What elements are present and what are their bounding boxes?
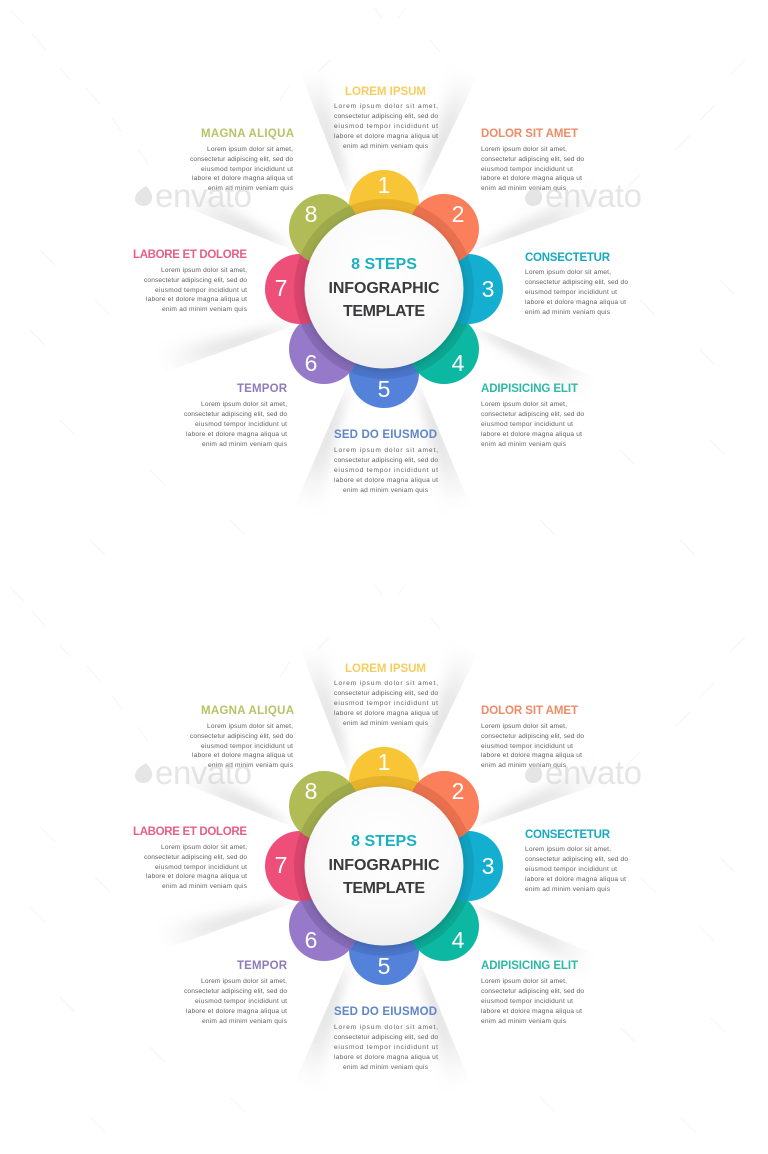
center disc	[304, 786, 464, 948]
petal 3 blue: 3	[482, 276, 494, 302]
text block: tempor: enim ad minim veniam quis	[202, 1018, 288, 1025]
text block: labore et dolore: labore et dolore magna aliqua ut	[146, 873, 247, 880]
text block: tempor: consectetur adipiscing elit, sed do	[184, 411, 287, 418]
petal 5 blue violet: 5	[378, 376, 390, 402]
text block: tempor: TEMPOR	[237, 383, 288, 395]
text block: tempor: eiusmod tempor incididunt ut	[195, 421, 287, 428]
center title: 8 STEPS	[351, 833, 417, 850]
text block: magna aliqua: Lorem ipsum dolor sit amet,	[207, 146, 293, 153]
petal 5 blue violet	[349, 940, 419, 985]
text block: tempor: consectetur adipiscing elit, sed do	[184, 988, 287, 995]
text block: sed do eiusmod: Lorem ipsum dolor sit amet,	[334, 447, 438, 454]
text block: magna aliqua: enim ad minim veniam quis	[208, 762, 294, 769]
watermark: envato left: envato	[155, 177, 252, 214]
text block: labore et dolore	[133, 249, 248, 313]
text block: consectetur: eiusmod tempor incididunt ut	[525, 289, 617, 296]
text block: labore et dolore: LABORE ET DOLORE	[133, 826, 247, 838]
text block: dolor sit amet: enim ad minim veniam quis	[481, 762, 567, 769]
petal 2 orange: 2	[452, 778, 464, 804]
wedge shadows	[182, 667, 580, 1065]
center title: TEMPLATE	[343, 303, 425, 320]
petal 6 purple: 6	[305, 350, 317, 376]
petal 5 blue violet: 5	[378, 953, 390, 979]
text block: magna aliqua: eiusmod tempor incididunt ut	[201, 743, 293, 750]
text block: dolor sit amet: labore et dolore magna aliqua ut	[481, 752, 582, 759]
text block: dolor sit amet	[481, 705, 584, 769]
center title	[328, 833, 440, 897]
petal 2 orange	[412, 194, 479, 261]
text block: sed do eiusmod: eiusmod tempor incididunt ut	[334, 1044, 438, 1051]
petal 1 yellow	[349, 170, 419, 215]
text block: tempor: Lorem ipsum dolor sit amet,	[201, 401, 287, 408]
text block: labore et dolore	[133, 826, 248, 890]
text block: magna aliqua: labore et dolore magna aliqua ut	[192, 175, 293, 182]
text block: sed do eiusmod: enim ad minim veniam quis	[343, 487, 429, 494]
text block: adipisicing elit: Lorem ipsum dolor sit amet,	[481, 978, 567, 985]
text block: lorem ipsum: eiusmod tempor incididunt ut	[334, 700, 438, 707]
text block: adipisicing elit: labore et dolore magna aliqua ut	[481, 431, 582, 438]
text block: adipisicing elit: consectetur adipiscing elit, sed do	[481, 988, 584, 995]
petal 6 purple: 6	[305, 927, 317, 953]
text block: adipisicing elit: eiusmod tempor incididunt ut	[481, 421, 573, 428]
text block: sed do eiusmod: consectetur adipiscing elit, sed do	[334, 1034, 438, 1041]
petal 3 blue	[456, 831, 503, 901]
text block: lorem ipsum: Lorem ipsum dolor sit amet,	[334, 103, 438, 110]
text block: labore et dolore: LABORE ET DOLORE	[133, 249, 247, 261]
center title: INFOGRAPHIC	[328, 280, 440, 297]
text block: adipisicing elit: labore et dolore magna aliqua ut	[481, 1008, 582, 1015]
text block: lorem ipsum	[334, 663, 438, 727]
text block: labore et dolore: enim ad minim veniam quis	[162, 883, 248, 890]
text block: labore et dolore: eiusmod tempor incididunt ut	[155, 287, 247, 294]
petal 2 orange	[412, 771, 479, 838]
text block: dolor sit amet	[481, 128, 584, 192]
petal 4 green: 4	[452, 927, 465, 953]
text block: lorem ipsum: eiusmod tempor incididunt ut	[334, 123, 438, 130]
center title	[328, 256, 440, 320]
text block: tempor: TEMPOR	[237, 960, 288, 972]
text block: tempor: eiusmod tempor incididunt ut	[195, 998, 287, 1005]
text block: dolor sit amet: consectetur adipiscing elit, sed do	[481, 733, 584, 740]
text block: lorem ipsum	[334, 86, 438, 150]
text block: labore et dolore: consectetur adipiscing elit, sed do	[144, 854, 247, 861]
petal 4 green	[412, 322, 479, 384]
text block: sed do eiusmod: labore et dolore magna aliqua ut	[334, 1054, 438, 1061]
text block: magna aliqua: MAGNA ALIQUA	[201, 128, 294, 140]
text block: dolor sit amet: eiusmod tempor incididunt ut	[481, 743, 573, 750]
text block: consectetur	[525, 252, 628, 316]
text block: adipisicing elit	[481, 383, 584, 448]
text block: adipisicing elit: Lorem ipsum dolor sit amet,	[481, 401, 567, 408]
text block: labore et dolore: consectetur adipiscing elit, sed do	[144, 277, 247, 284]
text block: adipisicing elit: enim ad minim veniam quis	[481, 1018, 567, 1025]
text block: tempor: enim ad minim veniam quis	[202, 441, 288, 448]
text block: consectetur: enim ad minim veniam quis	[525, 886, 611, 893]
watermark: envato right: envato	[545, 177, 642, 214]
panel: upper infographic	[134, 86, 640, 494]
text block: tempor: labore et dolore magna aliqua ut	[186, 1008, 287, 1015]
center title: INFOGRAPHIC	[328, 857, 440, 874]
text block: consectetur: eiusmod tempor incididunt ut	[525, 866, 617, 873]
petal 3 blue: 3	[482, 853, 494, 879]
petal 8 olive: 8	[305, 778, 317, 804]
petal 4 green: 4	[452, 350, 465, 376]
text block: magna aliqua: consectetur adipiscing elit, sed do	[190, 733, 293, 740]
text block: magna aliqua: eiusmod tempor incididunt ut	[201, 166, 293, 173]
text block: consectetur: labore et dolore magna aliqua ut	[525, 876, 626, 883]
text block: lorem ipsum: enim ad minim veniam quis	[343, 720, 429, 727]
text block: dolor sit amet: Lorem ipsum dolor sit amet,	[481, 146, 567, 153]
text block: consectetur: consectetur adipiscing elit, sed do	[525, 279, 628, 286]
wedge shadows	[182, 90, 580, 488]
text block: tempor: labore et dolore magna aliqua ut	[186, 431, 287, 438]
petal 8 olive	[289, 771, 356, 838]
petal 7 pink: 7	[275, 275, 287, 301]
text block: adipisicing elit	[481, 960, 584, 1025]
text block: sed do eiusmod	[334, 429, 438, 494]
text block: labore et dolore: labore et dolore magna aliqua ut	[146, 296, 247, 303]
text block: tempor	[184, 960, 288, 1025]
text block: lorem ipsum: consectetur adipiscing elit, sed do	[334, 690, 438, 697]
text block: lorem ipsum: consectetur adipiscing elit, sed do	[334, 113, 438, 120]
text block: lorem ipsum: Lorem ipsum dolor sit amet,	[334, 680, 438, 687]
text block: lorem ipsum: labore et dolore magna aliqua ut	[334, 710, 438, 717]
petal 7 pink: 7	[275, 852, 287, 878]
text block: dolor sit amet: enim ad minim veniam quis	[481, 185, 567, 192]
petal 1 yellow: 1	[378, 172, 390, 198]
text block: labore et dolore: enim ad minim veniam quis	[162, 306, 248, 313]
text block: dolor sit amet: DOLOR SIT AMET	[481, 705, 578, 717]
text block: magna aliqua	[190, 128, 294, 192]
text block: dolor sit amet: labore et dolore magna aliqua ut	[481, 175, 582, 182]
text block: tempor	[184, 383, 288, 448]
text block: magna aliqua: labore et dolore magna aliqua ut	[192, 752, 293, 759]
text block: dolor sit amet: consectetur adipiscing elit, sed do	[481, 156, 584, 163]
text block: adipisicing elit: ADIPISICING ELIT	[481, 960, 578, 972]
petal 1 yellow	[349, 747, 419, 792]
petal 6 purple	[289, 322, 356, 384]
petal 6 purple	[289, 899, 356, 961]
text block: lorem ipsum: enim ad minim veniam quis	[343, 143, 429, 150]
panel: lower infographic	[134, 664, 640, 1070]
petal 7 pink	[265, 254, 312, 324]
text block: sed do eiusmod: SED DO EIUSMOD	[334, 1006, 437, 1018]
text block: adipisicing elit: consectetur adipiscing elit, sed do	[481, 411, 584, 418]
text block: labore et dolore: eiusmod tempor incididunt ut	[155, 864, 247, 871]
petal 8 olive: 8	[305, 201, 317, 227]
text block: labore et dolore: Lorem ipsum dolor sit amet,	[161, 844, 247, 851]
text block: dolor sit amet: eiusmod tempor incididunt ut	[481, 166, 573, 173]
text block: sed do eiusmod: eiusmod tempor incididunt ut	[334, 467, 438, 474]
text block: adipisicing elit: ADIPISICING ELIT	[481, 383, 578, 395]
text block: consectetur: Lorem ipsum dolor sit amet,	[525, 269, 611, 276]
text block: magna aliqua: consectetur adipiscing elit, sed do	[190, 156, 293, 163]
petal 8 olive	[289, 194, 356, 261]
petal 2 orange: 2	[452, 201, 464, 227]
watermark: envato left: envato	[155, 754, 252, 791]
petal 5 blue violet	[349, 363, 419, 408]
text block: sed do eiusmod: labore et dolore magna aliqua ut	[334, 477, 438, 484]
center disc	[304, 210, 464, 372]
text block: magna aliqua: MAGNA ALIQUA	[201, 705, 294, 717]
text block: dolor sit amet: Lorem ipsum dolor sit amet,	[481, 723, 567, 730]
center title: TEMPLATE	[343, 880, 425, 897]
text block: adipisicing elit: eiusmod tempor incididunt ut	[481, 998, 573, 1005]
text block: lorem ipsum: LOREM IPSUM	[345, 86, 426, 98]
petal 7 pink	[265, 831, 312, 901]
watermark: envato right: envato	[545, 754, 642, 791]
text block: magna aliqua	[190, 705, 294, 769]
petal 1 yellow: 1	[378, 749, 390, 775]
center title: 8 STEPS	[351, 256, 417, 273]
text block: consectetur: CONSECTETUR	[525, 252, 611, 264]
text block: lorem ipsum: labore et dolore magna aliqua ut	[334, 133, 438, 140]
text block: consectetur: CONSECTETUR	[525, 829, 611, 841]
text block: consectetur: enim ad minim veniam quis	[525, 309, 611, 316]
text block: consectetur: consectetur adipiscing elit, sed do	[525, 856, 628, 863]
text block: consectetur: labore et dolore magna aliqua ut	[525, 299, 626, 306]
text block: consectetur	[525, 829, 628, 893]
text block: sed do eiusmod	[334, 1006, 438, 1071]
text block: consectetur: Lorem ipsum dolor sit amet,	[525, 846, 611, 853]
petal 3 blue	[456, 254, 503, 324]
text block: sed do eiusmod: consectetur adipiscing elit, sed do	[334, 457, 438, 464]
text block: labore et dolore: Lorem ipsum dolor sit amet,	[161, 267, 247, 274]
text block: sed do eiusmod: Lorem ipsum dolor sit amet,	[334, 1024, 438, 1031]
text block: magna aliqua: Lorem ipsum dolor sit amet,	[207, 723, 293, 730]
text block: lorem ipsum: LOREM IPSUM	[345, 663, 426, 675]
text block: adipisicing elit: enim ad minim veniam quis	[481, 441, 567, 448]
text block: sed do eiusmod: enim ad minim veniam quis	[343, 1064, 429, 1071]
text block: tempor: Lorem ipsum dolor sit amet,	[201, 978, 287, 985]
petal 4 green	[412, 899, 479, 961]
text block: dolor sit amet: DOLOR SIT AMET	[481, 128, 578, 140]
text block: magna aliqua: enim ad minim veniam quis	[208, 185, 294, 192]
text block: sed do eiusmod: SED DO EIUSMOD	[334, 429, 437, 441]
